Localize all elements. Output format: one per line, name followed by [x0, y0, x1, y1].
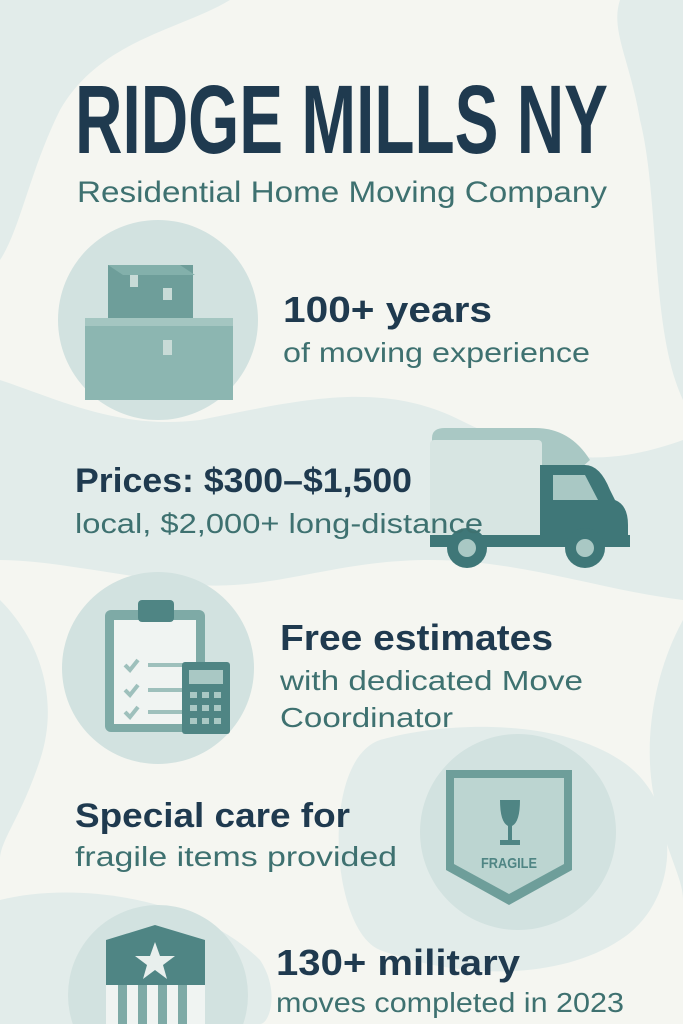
icon: fragile label: [420, 734, 616, 930]
text: prices: local, $2,000+ long-distance: [75, 508, 483, 539]
text: prices: [75, 462, 483, 539]
text: experience: of moving experience: [283, 337, 590, 368]
text: experience: 100+ years: [283, 289, 492, 330]
text: military: [276, 942, 624, 1018]
icon: truck: [430, 428, 630, 568]
text: military: 130+ military: [276, 942, 520, 983]
icon: boxes: [58, 220, 258, 420]
text: estimates: Free estimates: [280, 617, 553, 658]
text: estimates: Coordinator: [280, 702, 453, 733]
panel: estimates: [62, 572, 583, 764]
text: estimates: [279, 617, 583, 733]
text: fragile: [75, 797, 397, 872]
icon: fragile label: FRAGILE: [481, 855, 537, 872]
icon: military shield: [68, 905, 248, 1024]
panel: prices: [75, 428, 630, 568]
panel: military: [68, 905, 624, 1024]
text: fragile: Special care for: [75, 797, 350, 835]
text: experience: [283, 289, 590, 368]
text: estimates: with dedicated Move: [279, 665, 583, 696]
panel: fragile: [75, 734, 616, 930]
icon: clipboard and calculator: [62, 572, 254, 764]
text: fragile: fragile items provided: [75, 841, 397, 872]
subtitle: Residential Home Moving Company: [77, 176, 607, 209]
text: prices: Prices: $300–$1,500: [75, 462, 412, 500]
text: military: moves completed in 2023: [276, 987, 624, 1018]
panel: experience: [58, 220, 590, 420]
